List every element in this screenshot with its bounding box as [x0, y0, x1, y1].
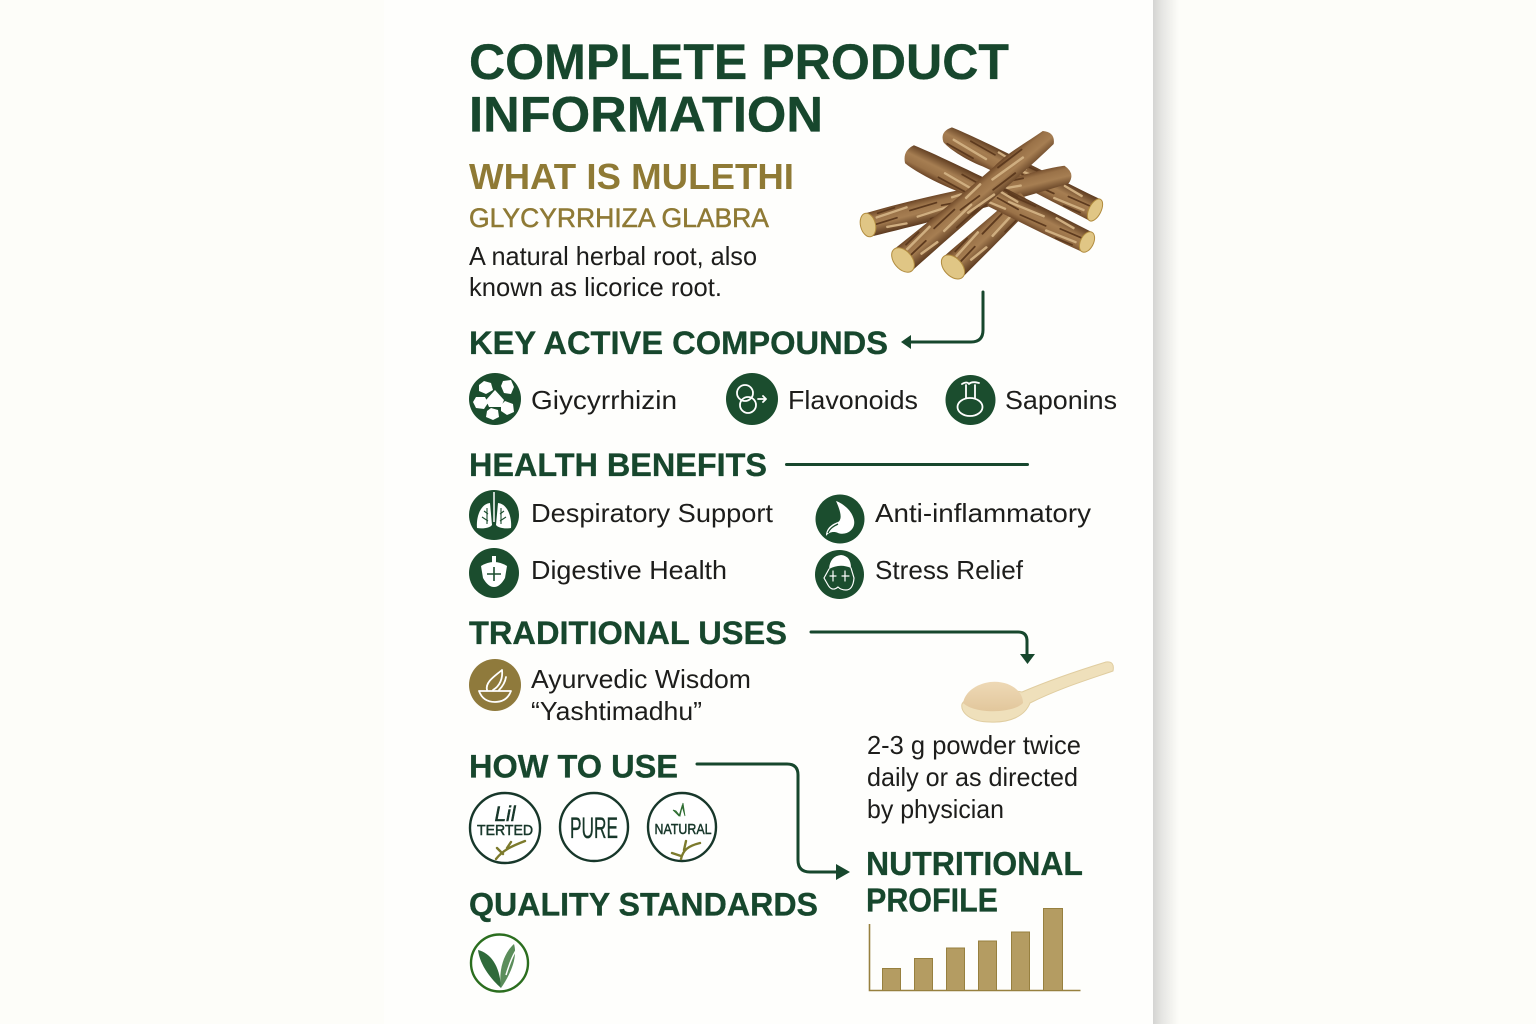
badge: tested: Lil [494, 803, 517, 826]
benefit: digestive health [469, 548, 727, 598]
sheet shadow [1153, 0, 1179, 1024]
description: known as licorice root. [469, 272, 722, 302]
heading: key active compounds: KEY ACTIVE COMPOUNDS [469, 325, 888, 361]
icon: linked rings [726, 373, 778, 425]
dosage text [867, 730, 1081, 824]
icon: stomach with plus [469, 548, 519, 598]
illustration: licorice root sticks [858, 122, 1106, 283]
dosage text: 2-3 g powder twice [867, 730, 1081, 760]
label: Anti-inflammatory [875, 498, 1091, 528]
white sheet [384, 0, 1153, 1024]
title: COMPLETE PRODUCT [469, 34, 1009, 90]
heading: nutritional profile: PROFILE [866, 882, 998, 918]
icon: mortar and herb [469, 659, 521, 711]
bar chart: nutritional profile [870, 908, 1080, 990]
icon: stomach [816, 494, 864, 544]
heading rule [785, 463, 1029, 466]
dosage text: daily or as directed [867, 762, 1078, 792]
title [469, 34, 1009, 142]
label: Despiratory Support [531, 498, 774, 528]
icon: molecule clusters [469, 373, 521, 425]
heading: traditional uses: TRADITIONAL USES [469, 615, 787, 651]
label: Giycyrrhizin [531, 385, 677, 415]
compound: saponins [946, 375, 1117, 425]
label: Flavonoids [788, 385, 918, 415]
label: Digestive Health [531, 555, 727, 585]
label [531, 664, 751, 726]
heading: what is mulethi: WHAT IS MULETHI [469, 156, 794, 197]
section: what is mulethi [469, 156, 794, 302]
heading: how to use: HOW TO USE [469, 748, 678, 784]
traditional use: ayurvedic wisdom [469, 659, 751, 726]
label: Ayurvedic Wisdom [531, 664, 751, 694]
illustration: spoon with powder [962, 662, 1113, 722]
icon: flask [946, 375, 996, 425]
heading: health benefits: HEALTH BENEFITS [469, 447, 767, 483]
benefit: stress relief [815, 550, 1024, 599]
benefit: anti-inflammatory [816, 494, 1091, 544]
arrow: how to use to nutritional profile [697, 764, 850, 880]
badge: natural: NATURAL [654, 822, 712, 838]
badge: pure [560, 793, 628, 861]
description [469, 241, 757, 302]
dosage text: by physician [867, 794, 1004, 824]
title: INFORMATION [469, 86, 823, 142]
label: Saponins [1005, 385, 1117, 415]
botanical name: GLYCYRRHIZA GLABRA [469, 203, 769, 233]
heading: nutritional profile [866, 845, 1083, 918]
badge: pure: PURE [570, 812, 618, 845]
heading: quality standards: QUALITY STANDARDS [469, 886, 818, 922]
icon: lungs [469, 490, 519, 540]
label: Stress Relief [875, 555, 1024, 585]
arrow: traditional uses to spoon [811, 632, 1035, 664]
badge: vegetarian leaf [471, 934, 528, 992]
compound: glycyrrhizin [469, 373, 677, 425]
icon: face [815, 550, 864, 599]
badge: natural [648, 793, 716, 861]
arrow: root to key compounds [901, 292, 983, 349]
compound: flavonoids [726, 373, 918, 425]
badge: tested [470, 793, 540, 863]
label: “Yashtimadhu” [531, 696, 702, 726]
heading: nutritional profile: NUTRITIONAL [866, 845, 1083, 882]
description: A natural herbal root, also [469, 241, 757, 271]
benefit: respiratory support [469, 490, 774, 540]
badge: tested: TERTED [477, 823, 533, 839]
